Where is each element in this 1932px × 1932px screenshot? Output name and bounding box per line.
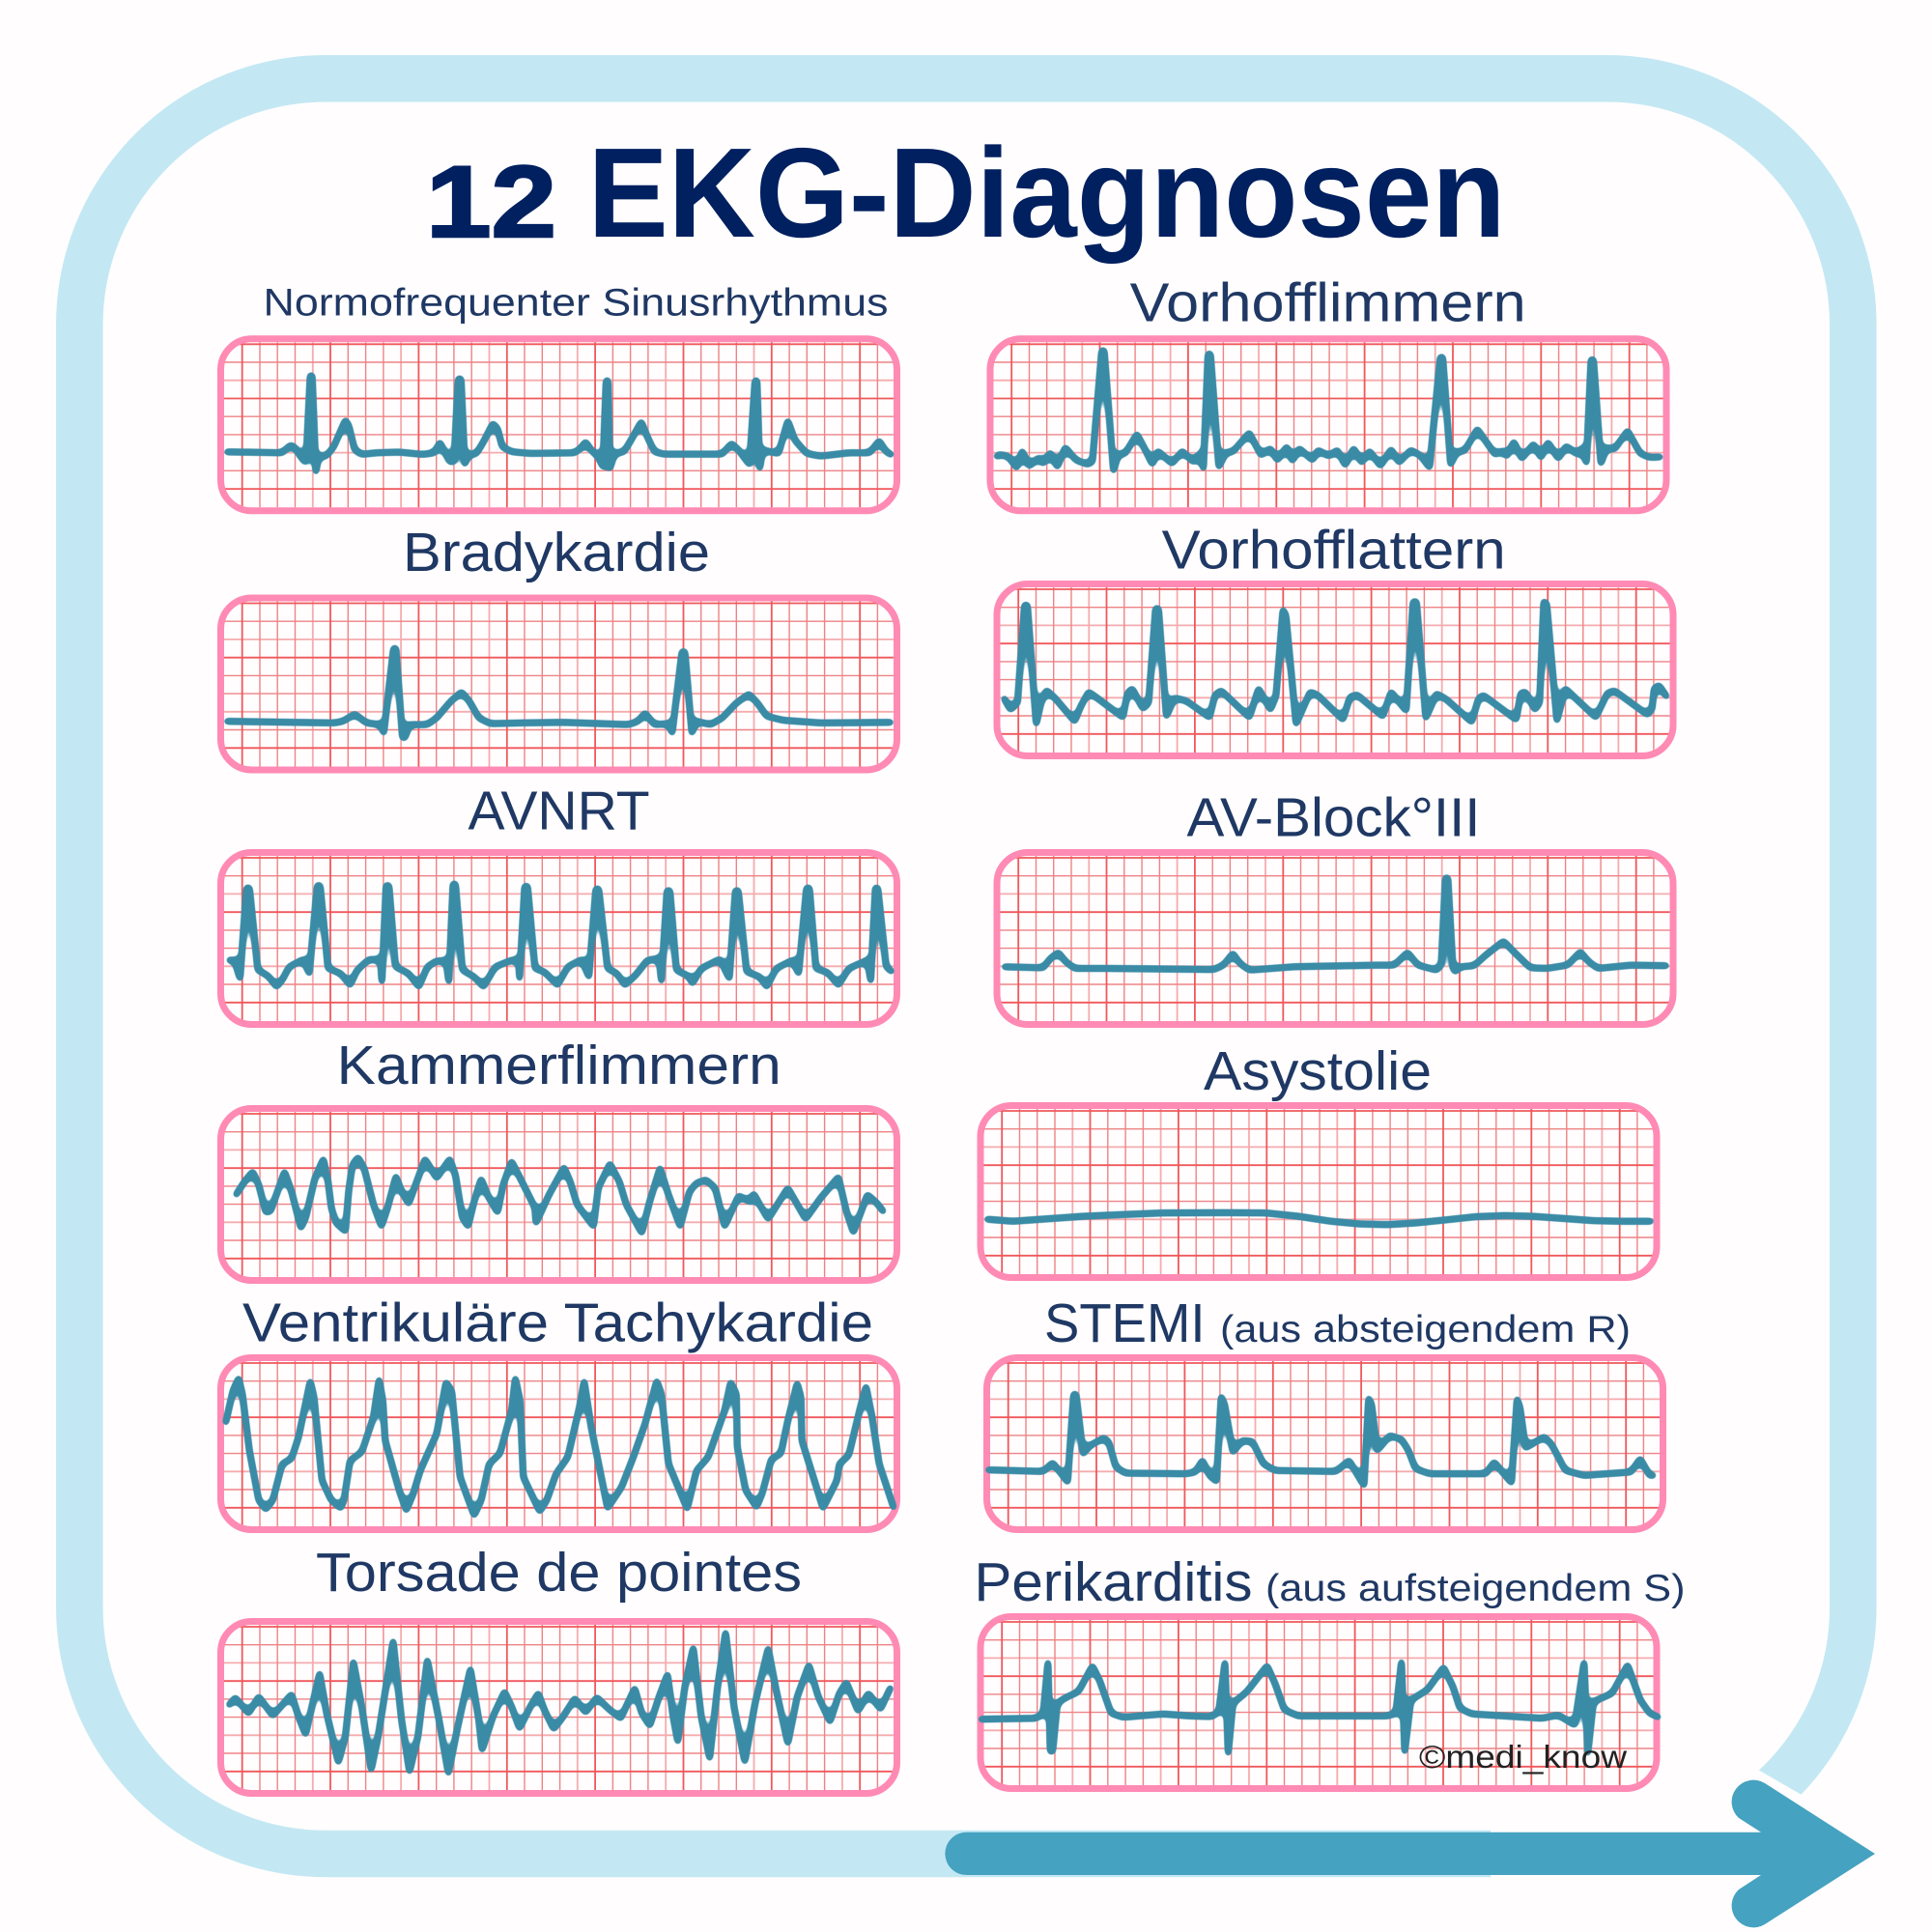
heading: AV-Block°III: AV-Block°III bbox=[1186, 786, 1480, 848]
heading: Perikarditis bbox=[974, 1551, 1685, 1612]
arrow bbox=[945, 1780, 1875, 1927]
panel: STEMI bbox=[983, 1358, 1666, 1530]
credit: medi_know: ©medi_know bbox=[1419, 1739, 1627, 1775]
heading: Normofrequenter Sinusrhythmus: Normofrequenter Sinusrhythmus bbox=[263, 282, 889, 325]
panel: Bradykardie bbox=[217, 598, 900, 770]
panel: AV-Block III bbox=[993, 852, 1677, 1024]
heading: STEMI: (aus absteigendem R) bbox=[1220, 1309, 1631, 1350]
heading: Torsade de pointes: Torsade de pointes bbox=[316, 1542, 802, 1603]
trace: AV block III bbox=[1001, 878, 1670, 972]
panel: Kammerflimmern bbox=[217, 1109, 900, 1281]
panel: Perikarditis bbox=[978, 1617, 1662, 1789]
frame cut-out around arrow bbox=[1491, 1770, 1932, 1932]
heading: Perikarditis: Perikarditis bbox=[974, 1551, 1252, 1612]
panel: Ventrikuläre Tachykardie bbox=[217, 1358, 900, 1530]
trace: ventricular fibrillation bbox=[235, 1157, 885, 1233]
heading: Vorhofflattern: Vorhofflattern bbox=[1162, 520, 1506, 580]
panel: Vorhofflimmern bbox=[987, 339, 1669, 511]
heading: Vorhofflimmern: Vorhofflimmern bbox=[1130, 271, 1526, 332]
heading: Asystolie: Asystolie bbox=[1204, 1040, 1432, 1101]
trace: bradycardia bbox=[224, 648, 895, 738]
panel: Normofrequenter Sinusrhythmus bbox=[217, 339, 900, 511]
trace: torsade de pointes bbox=[227, 1633, 892, 1774]
panel: Asystolie bbox=[978, 1105, 1660, 1277]
panel: AVNRT bbox=[217, 852, 900, 1024]
heading: Ventrikuläre Tachykardie: Ventrikuläre Tachykardie bbox=[242, 1293, 873, 1353]
trace: pericarditis bbox=[978, 1662, 1662, 1753]
trace: AVNRT bbox=[226, 884, 895, 986]
trace: atrial fibrillation bbox=[994, 351, 1663, 470]
heading: Bradykardie: Bradykardie bbox=[403, 522, 710, 582]
panel: Torsade de pointes bbox=[217, 1621, 900, 1793]
trace: sinus rhythm bbox=[224, 375, 895, 471]
heading: AVNRT: AVNRT bbox=[468, 781, 650, 841]
trace: atrial flutter bbox=[1003, 602, 1668, 724]
heading: Perikarditis: (aus aufsteigendem S) bbox=[1265, 1568, 1685, 1609]
trace: asystole bbox=[983, 1212, 1655, 1225]
panel: Vorhofflattern bbox=[993, 583, 1677, 755]
trace: ventricular tachycardia bbox=[225, 1378, 895, 1516]
heading: STEMI bbox=[1044, 1293, 1631, 1353]
heading: Kammerflimmern: Kammerflimmern bbox=[337, 1035, 781, 1095]
title: 12 bbox=[426, 146, 556, 259]
heading: STEMI: STEMI bbox=[1044, 1293, 1206, 1353]
trace: STEMI bbox=[984, 1394, 1657, 1486]
title: EKG-Diagnosen bbox=[587, 122, 1505, 264]
